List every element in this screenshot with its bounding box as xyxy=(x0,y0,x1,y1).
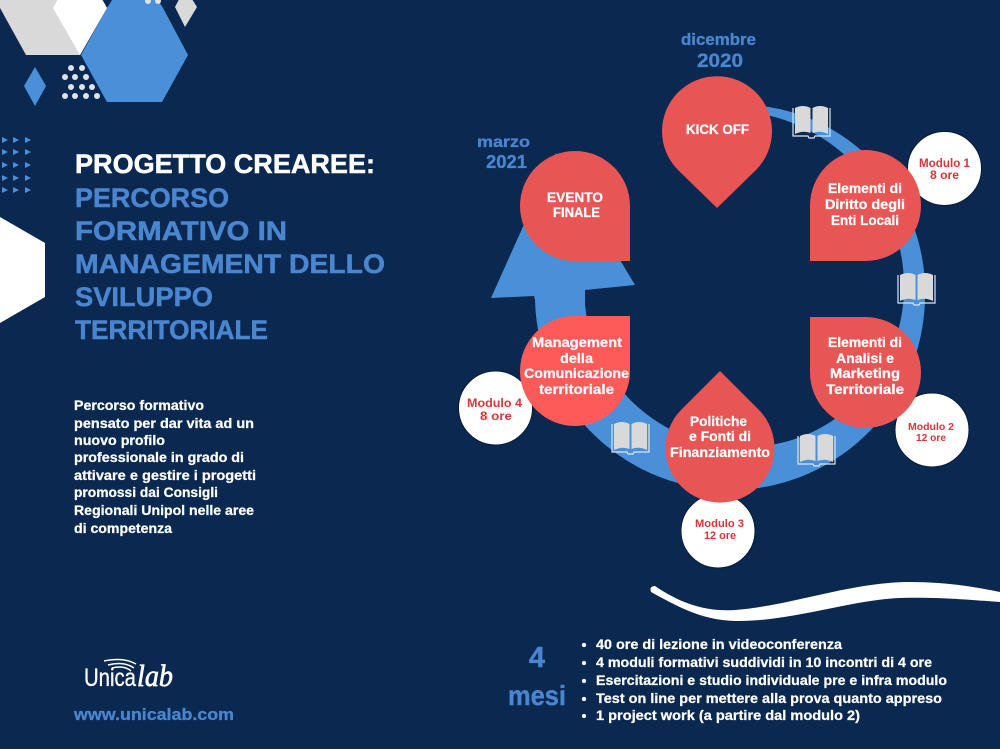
book icon 1 xyxy=(793,106,830,138)
feature list: 40 ore di lezione in videoconferenza xyxy=(596,636,842,652)
decorative triangle grid xyxy=(2,137,31,193)
date: marzo 2021 xyxy=(477,134,530,172)
book icon 4 xyxy=(612,422,649,454)
feature list: Test on line per mettere alla prova quanto appreso xyxy=(596,690,942,706)
drop: Elementi di Analisi e Marketing Territoriale xyxy=(810,317,921,428)
drop: Elementi di Analisi e Marketing Territoriale: Elementi di xyxy=(828,334,902,350)
badge: Modulo 4: Modulo 4 xyxy=(467,396,522,410)
drop: Kick off: KICK OFF xyxy=(686,121,749,137)
date: marzo 2021: marzo xyxy=(477,134,530,151)
description text: nuovo profilo xyxy=(74,433,165,448)
badge: Modulo 2 xyxy=(895,393,969,467)
title: PERCORSO xyxy=(75,183,229,213)
feature list: 1 project work (a partire dal modulo 2) xyxy=(596,707,860,723)
badge: Modulo 2: Modulo 2 xyxy=(908,421,954,433)
drop: Elementi di Diritto degli Enti Locali xyxy=(810,150,921,261)
drop: Management della Comunicazione territoriale: Management xyxy=(532,334,622,350)
title xyxy=(75,149,385,345)
drop: Kick off xyxy=(662,76,772,208)
badge: Modulo 3: Modulo 3 xyxy=(695,518,744,530)
white swoosh xyxy=(650,582,1000,621)
feature list: 4 moduli formativi suddividi in 10 incontri di 4 ore xyxy=(596,654,932,670)
date: dicembre 2020: dicembre xyxy=(681,31,756,49)
badge: Modulo 4 xyxy=(458,371,532,445)
drop: Elementi di Diritto degli Enti Locali: Diritto degli xyxy=(825,196,905,212)
drop: Politiche e Fonti di Finanziamento: Politiche xyxy=(690,413,747,429)
title: TERRITORIALE xyxy=(75,315,268,345)
badge: Modulo 4: 8 ore xyxy=(480,409,512,423)
drop: Politiche e Fonti di Finanziamento: Finanziamento xyxy=(670,444,770,460)
drop: Evento finale: FINALE xyxy=(553,204,600,220)
description text: Regionali Unipol nelle aree xyxy=(74,503,255,518)
description text: pensato per dar vita ad un xyxy=(74,416,254,431)
title: MANAGEMENT DELLO xyxy=(75,249,385,279)
decorative hexagon cluster xyxy=(0,0,197,106)
description text: professionale in grado di xyxy=(74,450,244,465)
logo: Unicalab: lab xyxy=(137,658,173,693)
duration: 4 mesi: 4 xyxy=(529,642,545,674)
title: PROGETTO CREAREE: xyxy=(75,149,375,179)
title: FORMATIVO IN xyxy=(75,216,287,246)
drop: Elementi di Analisi e Marketing Territoriale: Marketing xyxy=(830,365,900,381)
date: dicembre 2020: 2020 xyxy=(697,51,743,72)
badge: Modulo 1: 8 ore xyxy=(930,170,959,182)
date: marzo 2021: 2021 xyxy=(486,152,527,172)
feature list xyxy=(582,636,947,723)
description text: attivare e gestire i progetti xyxy=(74,468,256,483)
book icon 2 xyxy=(898,273,935,305)
duration: 4 mesi xyxy=(508,642,566,711)
logo: Unicalab: Unica xyxy=(84,664,136,692)
badge: Modulo 3 xyxy=(681,494,755,568)
badge: Modulo 1 xyxy=(908,132,982,206)
book icon 3 xyxy=(798,434,835,466)
title: SVILUPPO xyxy=(75,282,213,312)
badge: Modulo 1: Modulo 1 xyxy=(919,158,971,170)
website url: www.unicalab.com xyxy=(73,706,234,724)
logo: Unicalab xyxy=(84,658,173,693)
drop: Elementi di Diritto degli Enti Locali: Elementi di xyxy=(828,180,902,196)
drop: Elementi di Analisi e Marketing Territoriale: Analisi e xyxy=(836,350,894,366)
description text xyxy=(74,398,256,536)
badge: Modulo 2: 12 ore xyxy=(916,432,946,444)
feature list: Esercitazioni e studio individuale pre e infra modulo xyxy=(596,672,947,688)
drop: Management della Comunicazione territoriale: territoriale xyxy=(539,381,614,397)
date: dicembre 2020 xyxy=(681,31,756,72)
description text: promossi dai Consigli xyxy=(74,485,218,500)
description text: di competenza xyxy=(74,521,173,536)
duration: 4 mesi: mesi xyxy=(508,680,566,711)
drop: Evento finale xyxy=(520,151,630,261)
white hexagon at left edge xyxy=(0,217,45,323)
drop: Evento finale: EVENTO xyxy=(547,189,603,205)
drop: Politiche e Fonti di Finanziamento: e Fonti di xyxy=(689,428,751,444)
circular arrow path xyxy=(491,105,925,490)
description text: Percorso formativo xyxy=(74,398,204,413)
drop: Politiche e Fonti di Finanziamento xyxy=(666,371,774,503)
badge: Modulo 3: 12 ore xyxy=(704,530,736,542)
drop: Management della Comunicazione territoriale: Comunicazione xyxy=(524,365,629,381)
drop: Management della Comunicazione territoriale xyxy=(520,316,630,426)
drop: Elementi di Analisi e Marketing Territoriale: Territoriale xyxy=(826,381,904,397)
drop: Elementi di Diritto degli Enti Locali: Enti Locali xyxy=(831,212,899,228)
drop: Management della Comunicazione territoriale: della xyxy=(560,350,593,366)
